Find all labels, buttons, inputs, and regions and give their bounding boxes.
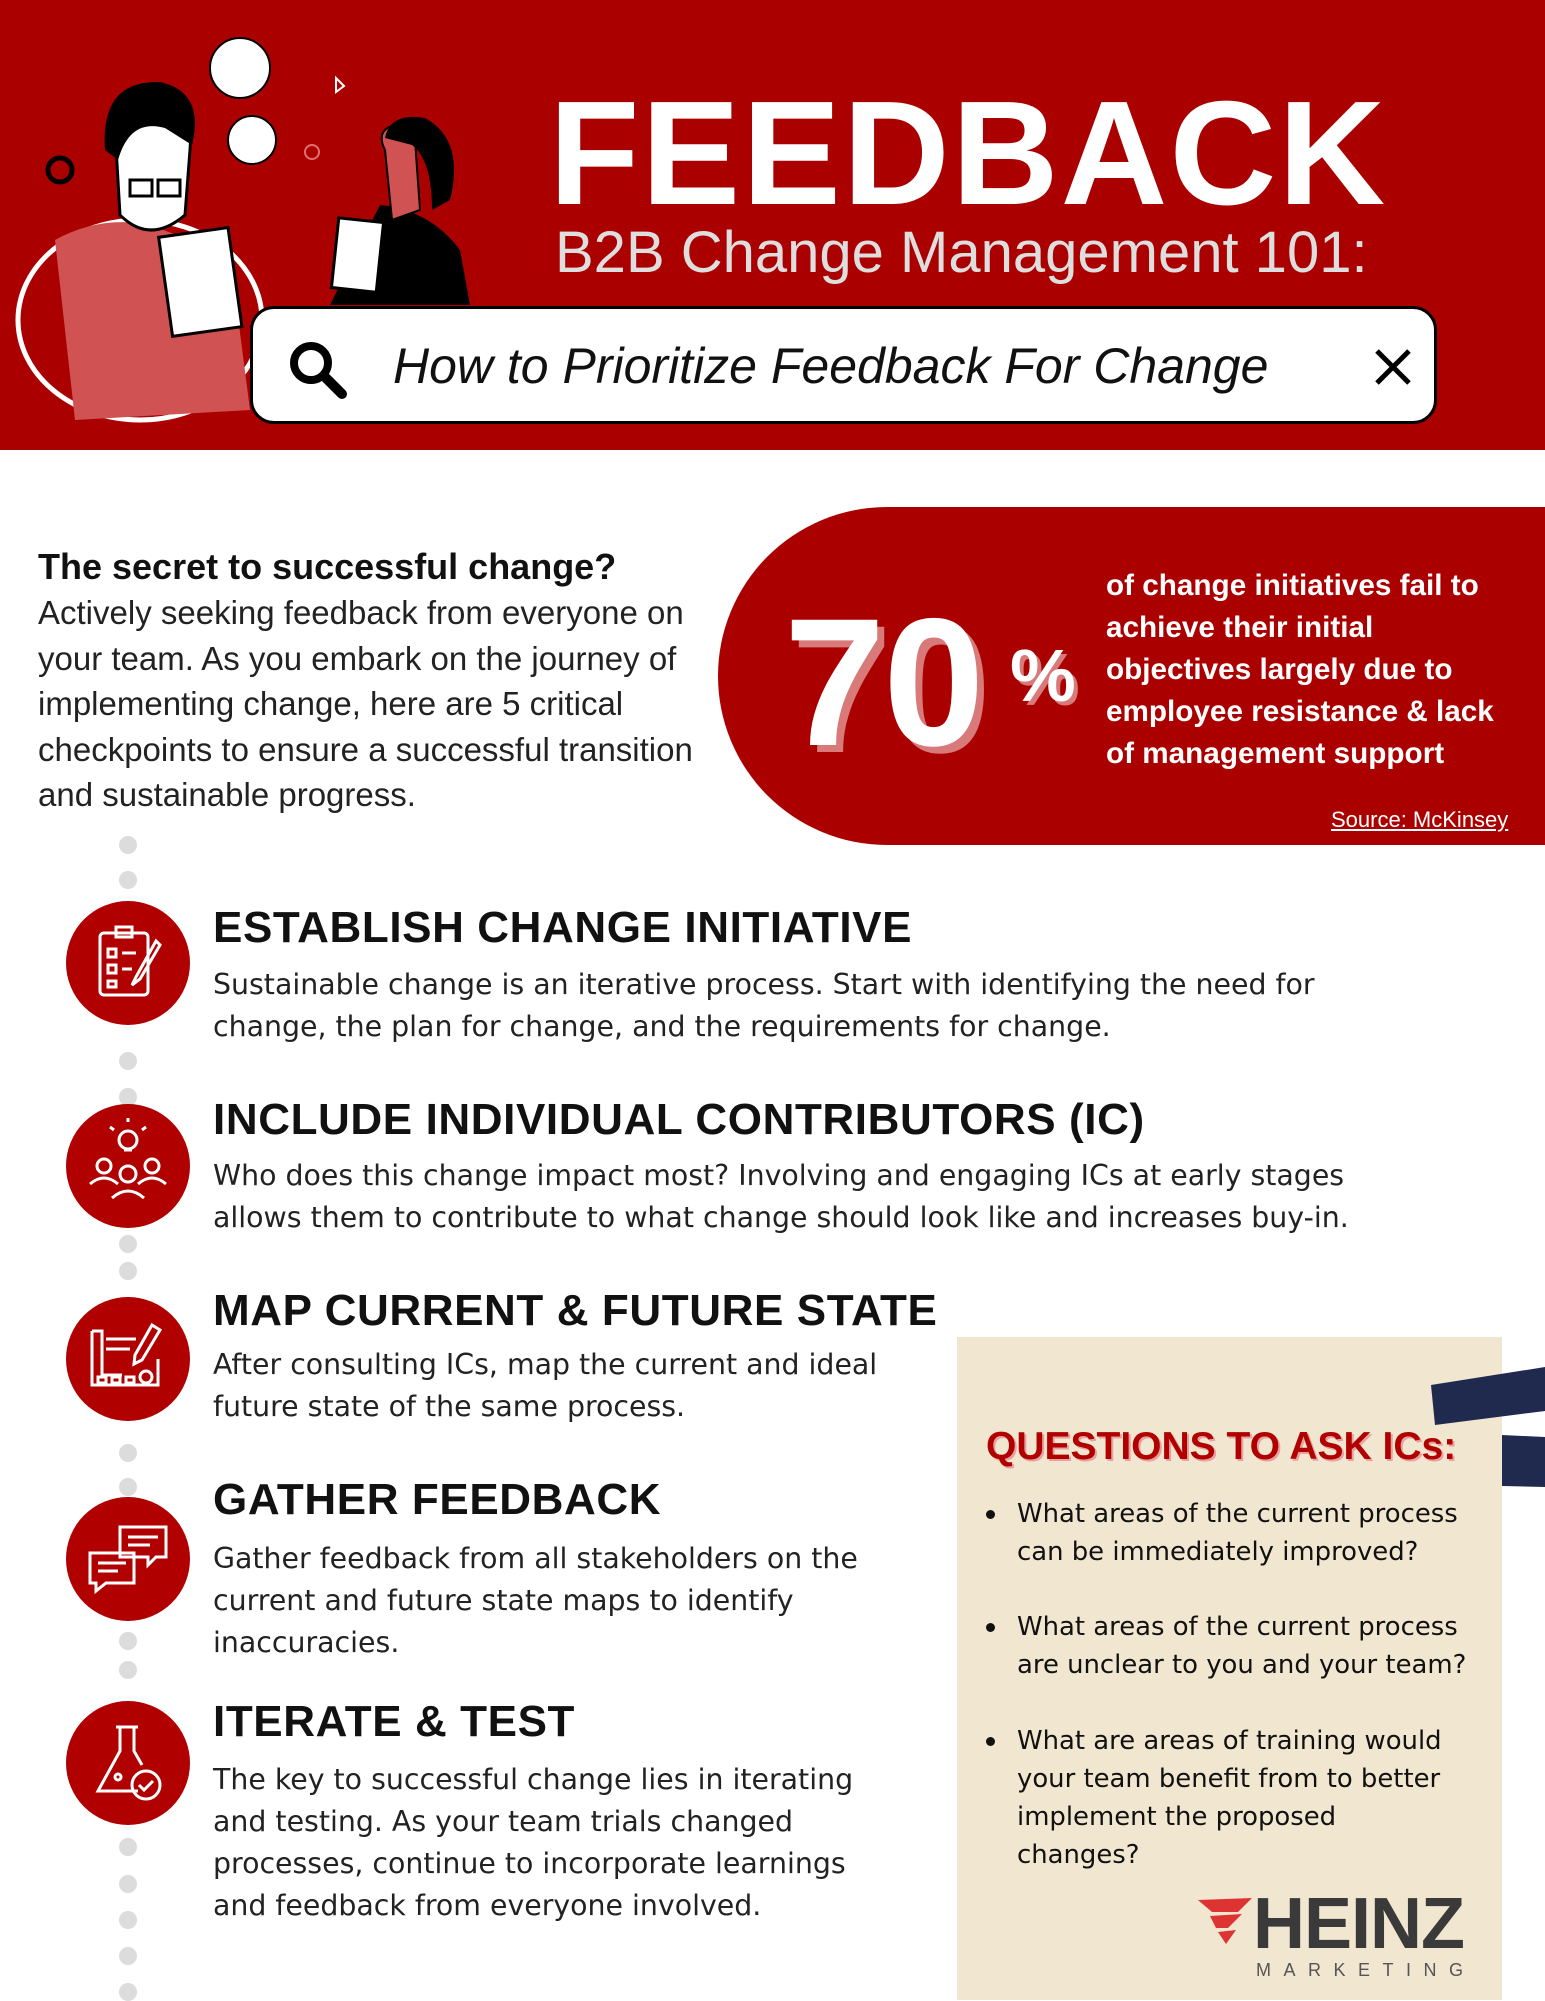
step 5 text — [212, 1763, 853, 1922]
stat text: employee resistance & lack — [1106, 695, 1494, 728]
step 5 text: processes, continue to incorporate learnings — [213, 1847, 846, 1880]
step 5 text: and testing. As your team trials changed — [213, 1805, 793, 1838]
step 5 text: and feedback from everyone involved. — [213, 1889, 761, 1922]
icon: flask — [66, 1701, 190, 1825]
icon: map — [66, 1297, 190, 1421]
question 3: changes? — [1017, 1840, 1140, 1870]
logo: Heinz Marketing — [1198, 1884, 1476, 1980]
icon: close X — [1375, 349, 1411, 385]
icon: chat bubbles — [66, 1497, 190, 1621]
search bar — [250, 306, 1437, 424]
intro text block: Actively seeking feedback from everyone on — [38, 594, 684, 631]
step 1 text — [213, 968, 1315, 1043]
source link: Source: McKinsey — [1331, 807, 1508, 832]
question 3: implement the proposed — [1017, 1802, 1336, 1832]
big number: 70 — [784, 580, 982, 784]
step 3 heading: MAP CURRENT & FUTURE STATE — [213, 1286, 937, 1335]
icon: team — [66, 1104, 190, 1228]
question 1: What areas of the current process — [1017, 1499, 1458, 1529]
timeline dots — [119, 836, 137, 2001]
stat panel: 70% — [718, 507, 1545, 845]
step 2 heading: INCLUDE INDIVIDUAL CONTRIBUTORS (IC) — [213, 1095, 1145, 1144]
step 5 text: The key to successful change lies in iterating — [213, 1763, 853, 1796]
step 3 text: future state of the same process. — [213, 1390, 685, 1423]
question 3: your team benefit from to better — [1017, 1764, 1440, 1794]
logo: Heinz Marketing: HEINZ — [1253, 1884, 1464, 1964]
step 2 text: Who does this change impact most? Involving and engaging ICs at early stages — [213, 1159, 1344, 1192]
questions heading: QUESTIONS TO ASK ICs: — [986, 1425, 1456, 1468]
step 1 text: change, the plan for change, and the requirements for change. — [213, 1010, 1111, 1043]
step 5 heading: ITERATE & TEST — [213, 1697, 575, 1746]
question 2: What areas of the current process — [1017, 1612, 1458, 1642]
icon: clipboard — [66, 901, 190, 1025]
question 3 — [1017, 1722, 1442, 1874]
question 3: What are areas of training would — [1017, 1726, 1442, 1756]
step 4 text: Gather feedback from all stakeholders on the — [213, 1542, 858, 1575]
stat text: objectives largely due to — [1106, 653, 1452, 686]
intro text block: implementing change, here are 5 critical — [38, 685, 623, 722]
step 2 text — [213, 1159, 1349, 1234]
step 4 text: current and future state maps to identify — [213, 1584, 794, 1617]
illustration: people talking — [16, 37, 470, 422]
logo: Heinz Marketing: MARKETING — [1256, 1960, 1476, 1980]
step 3 text — [213, 1348, 877, 1423]
question 1 — [1017, 1495, 1458, 1571]
title: FEEDBACK — [549, 71, 1387, 236]
question 2: are unclear to you and your team? — [1017, 1650, 1466, 1680]
step 2 text: allows them to contribute to what change should look like and increases buy-in. — [213, 1201, 1349, 1234]
step 4 text: inaccuracies. — [213, 1626, 399, 1659]
intro text block: checkpoints to ensure a successful transition — [38, 730, 693, 768]
intro text block: your team. As you embark on the journey of — [38, 640, 676, 676]
step 3 text: After consulting ICs, map the current and ideal — [213, 1348, 877, 1381]
panel: questions to ask ICs — [957, 1337, 1502, 2000]
search text: How to Prioritize Feedback For Change — [393, 338, 1268, 394]
stat text: of management support — [1106, 737, 1444, 770]
question 2 — [1017, 1608, 1466, 1684]
step 4 heading: GATHER FEEDBACK — [213, 1475, 661, 1524]
intro text block: and sustainable progress. — [38, 776, 416, 813]
decor: navy bars — [1431, 1367, 1545, 1487]
stat text — [1106, 569, 1494, 770]
question 1: can be immediately improved? — [1017, 1537, 1418, 1567]
subtitle: B2B Change Management 101: — [555, 220, 1368, 285]
header band — [0, 0, 1545, 450]
step 1 text: Sustainable change is an iterative process. Start with identifying the need for — [213, 968, 1315, 1001]
percent sign: % — [1010, 634, 1076, 717]
stat text: of change initiatives fail to — [1106, 569, 1479, 602]
icon: magnifier — [290, 342, 347, 399]
intro text block — [38, 546, 693, 813]
step 4 text — [213, 1542, 858, 1659]
intro text block: The secret to successful change? — [38, 546, 616, 587]
step 1 heading: ESTABLISH CHANGE INITIATIVE — [213, 903, 912, 952]
stat text: achieve their initial — [1106, 611, 1373, 644]
